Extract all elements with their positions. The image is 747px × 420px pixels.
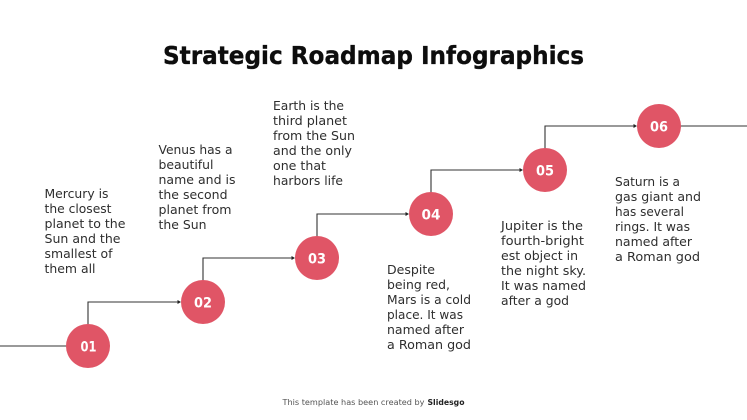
step 04 xyxy=(409,192,453,236)
text: Earth: Earth is the xyxy=(273,99,344,114)
text: Jupiter: fourth-bright xyxy=(501,234,584,249)
text: Venus: name and is xyxy=(158,173,236,188)
text: Earth: one that xyxy=(273,159,326,174)
arrow: 03 to 04 xyxy=(317,212,409,237)
text: Jupiter: est object in xyxy=(501,249,578,264)
text: Mercury: planet to the xyxy=(44,217,126,232)
text: Mercury xyxy=(44,187,126,277)
arrow: 02 to 03 xyxy=(203,256,295,281)
text: Saturn: named after xyxy=(615,235,693,250)
arrow: 06 exit xyxy=(681,125,747,127)
text: Earth: third planet xyxy=(273,114,347,129)
footer credit: This template has been created by xyxy=(281,398,425,407)
step 01: 01 xyxy=(80,340,96,356)
step 05: 05 xyxy=(536,164,554,180)
step 06: 06 xyxy=(650,120,668,136)
step 03: 03 xyxy=(308,252,326,268)
title: Strategic Roadmap Infographics xyxy=(163,41,584,70)
text: Mars: named after xyxy=(387,323,465,338)
text: Venus: beautiful xyxy=(158,158,214,173)
arrow: 04 to 05 xyxy=(431,168,523,193)
text: Earth xyxy=(273,99,355,189)
step 02: 02 xyxy=(194,296,212,312)
step 04: 04 xyxy=(422,208,440,224)
step 03 xyxy=(295,236,339,280)
text: Mars: being red, xyxy=(387,278,450,293)
arrow: 05 to 06 xyxy=(545,124,637,149)
text: Jupiter: It was named xyxy=(501,279,586,294)
text: Earth: and the only xyxy=(273,144,352,159)
text: Mercury: Sun and the xyxy=(44,232,121,247)
text: Mars xyxy=(387,263,471,353)
step 02 xyxy=(181,280,225,324)
step 01 xyxy=(66,324,110,368)
text: Saturn: Saturn is a xyxy=(615,175,680,190)
text: Saturn xyxy=(615,175,701,265)
text: Mars: a Roman god xyxy=(387,338,471,353)
text: Venus: Venus has a xyxy=(158,143,232,158)
arrow: start to 01 xyxy=(0,345,67,347)
text: Venus: the second xyxy=(158,188,228,203)
text: Saturn: a Roman god xyxy=(615,250,700,265)
text: Mars: place. It was xyxy=(387,308,463,323)
text: Mercury: the closest xyxy=(44,202,112,217)
text: Earth: harbors life xyxy=(273,174,343,189)
text: Jupiter xyxy=(500,219,586,309)
text: Mercury: them all xyxy=(44,262,96,277)
text: Saturn: gas giant and xyxy=(615,190,701,205)
footer credit: Slidesgo xyxy=(428,398,465,407)
step 06 xyxy=(637,104,681,148)
arrow: 01 to 02 xyxy=(88,300,181,325)
text: Venus: the Sun xyxy=(158,218,206,233)
text: Mercury: smallest of xyxy=(44,247,113,262)
step 05 xyxy=(523,148,567,192)
text: Jupiter: Jupiter is the xyxy=(500,219,583,234)
text: Mercury: Mercury is xyxy=(44,187,109,202)
text: Venus: planet from xyxy=(158,203,232,218)
text: Venus xyxy=(158,143,236,233)
text: Saturn: rings. It was xyxy=(615,220,690,235)
text: Mars: Despite xyxy=(387,263,435,278)
text: Jupiter: the night sky. xyxy=(501,264,586,279)
text: Mars: Mars is a cold xyxy=(387,293,471,308)
text: Saturn: has several xyxy=(615,205,684,220)
text: Jupiter: after a god xyxy=(501,294,569,309)
text: Earth: from the Sun xyxy=(273,129,355,144)
